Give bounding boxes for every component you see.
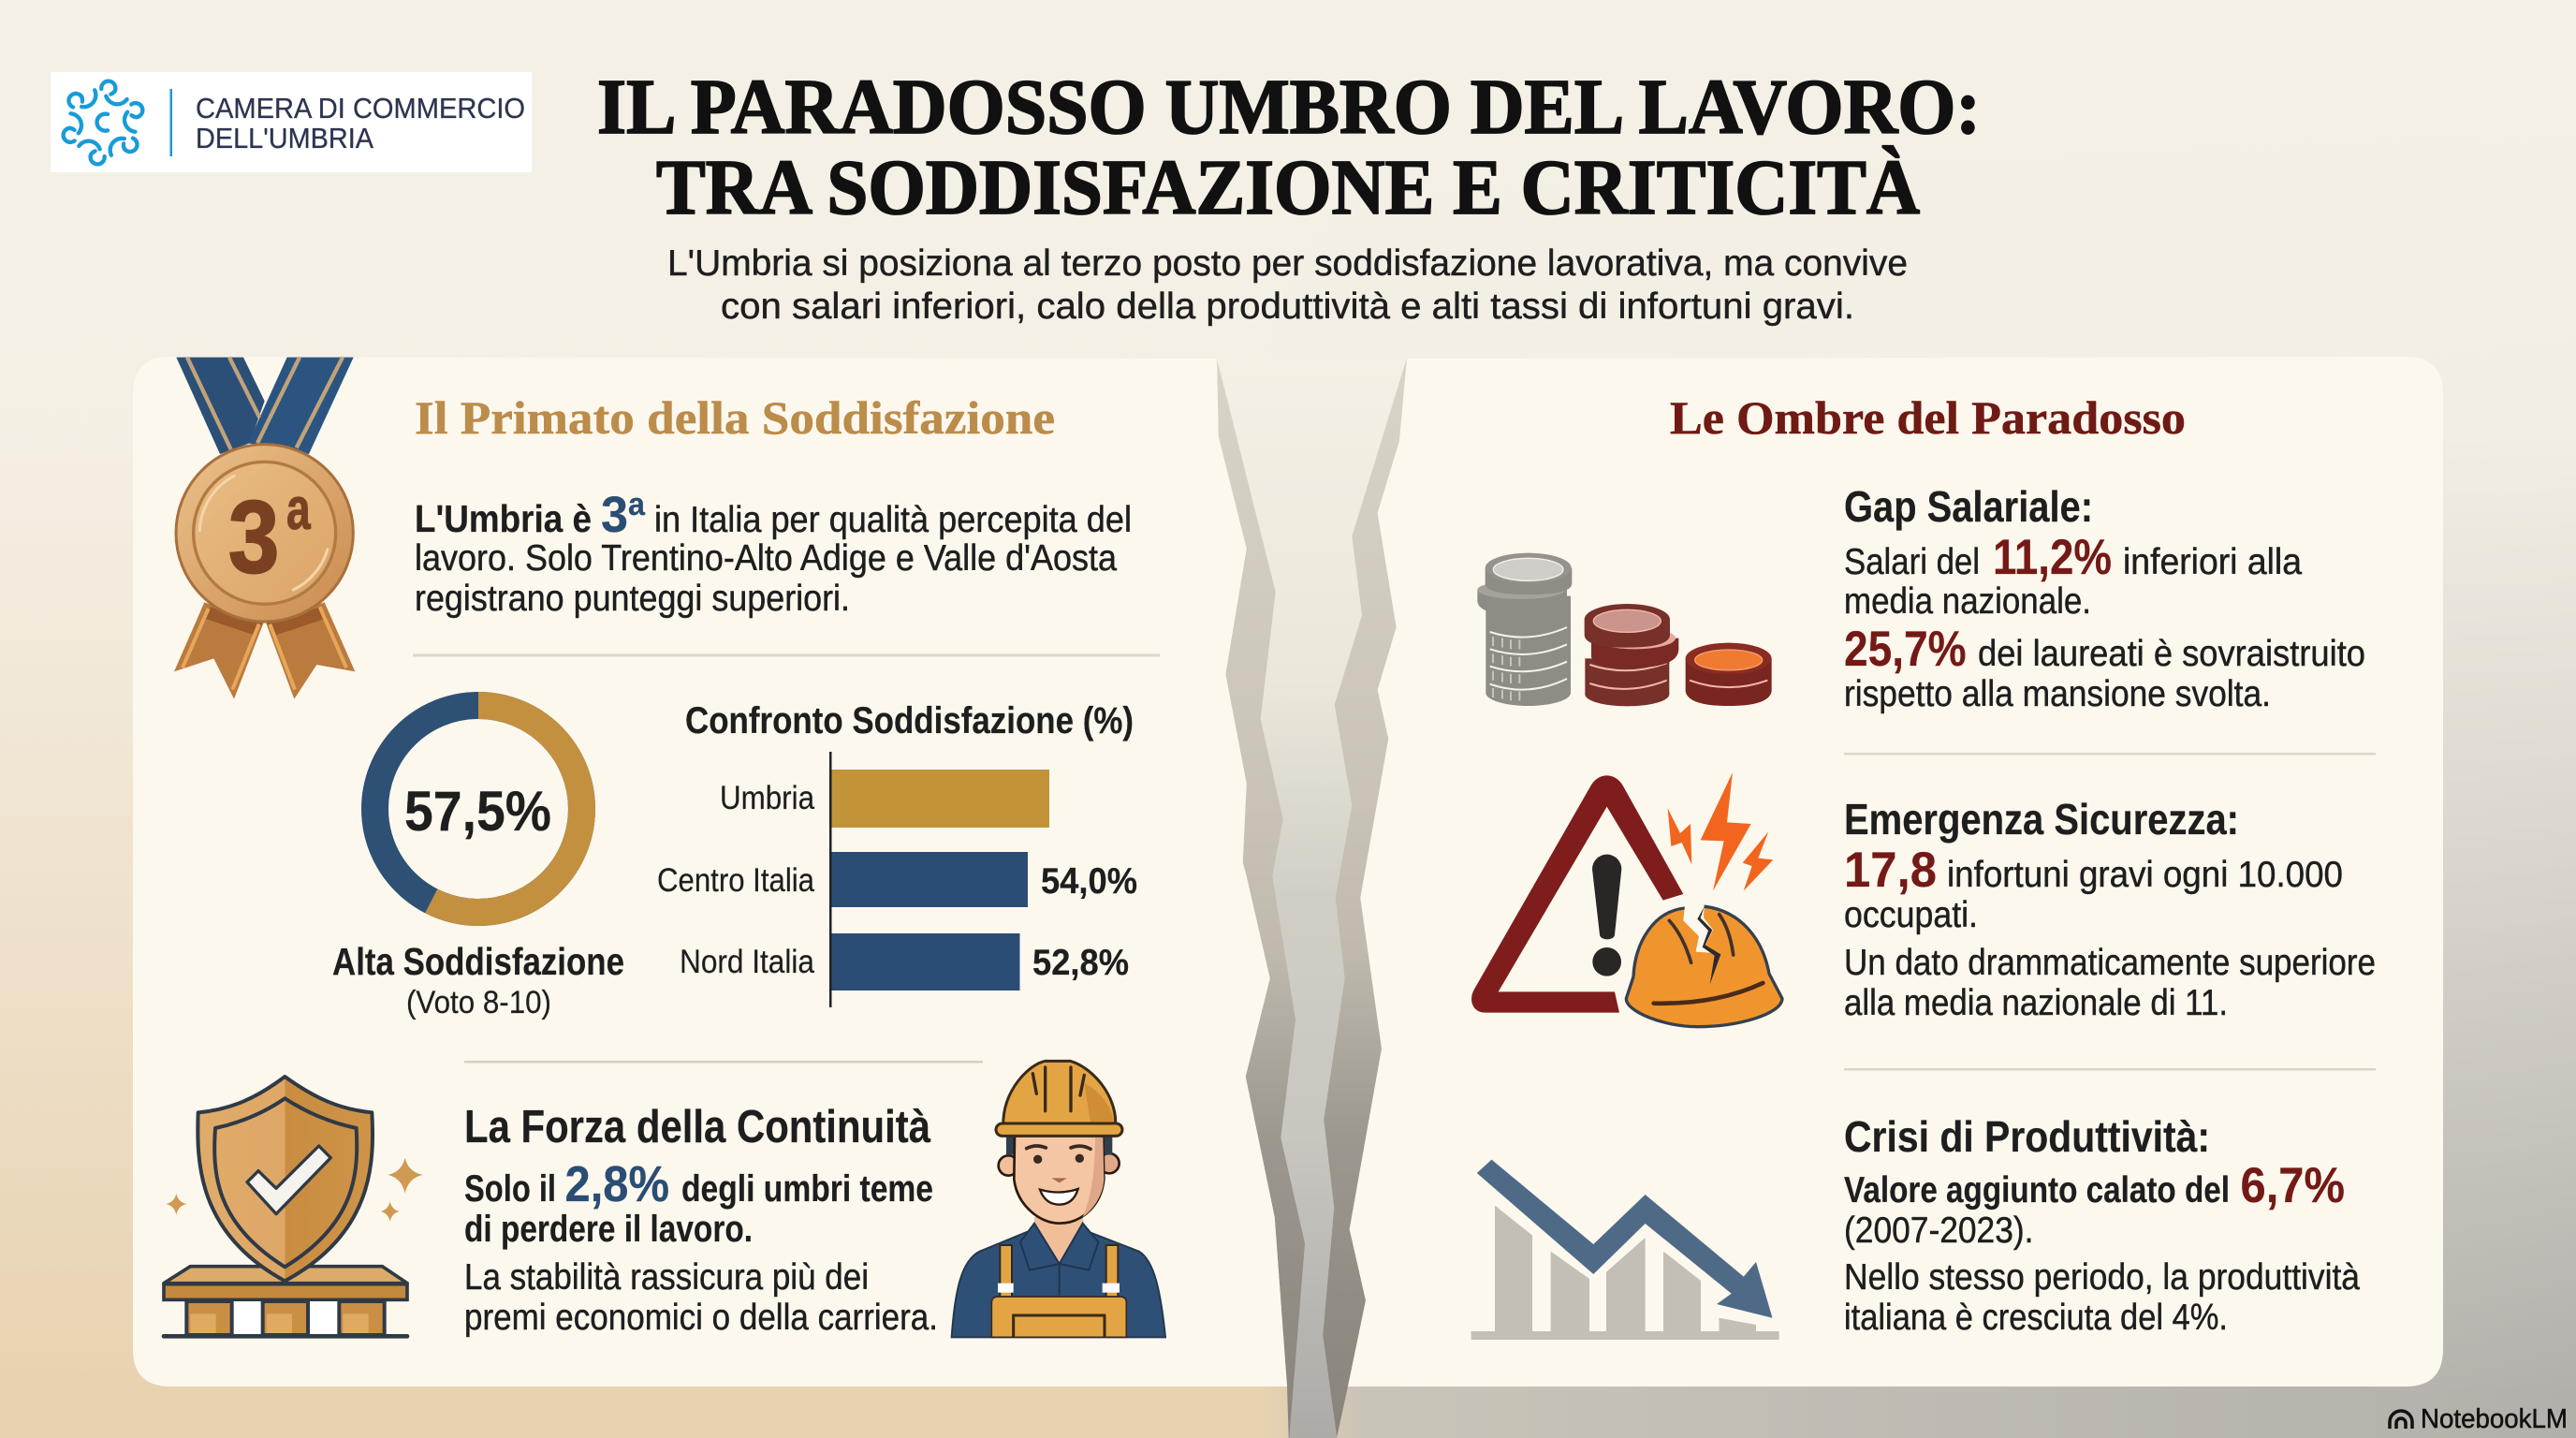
donut chart: 57,5%: 57,5%	[404, 780, 551, 843]
icon: warning triangle and cracked helmet	[1471, 772, 1782, 1027]
title: IL PARADOSSO UMBRO DEL LAVORO:	[597, 64, 1981, 151]
heading: Le Ombre del Paradosso: Le Ombre del Paradosso	[1670, 391, 2186, 444]
text block: La Forza della Continuità: premi economici o della carriera.	[464, 1298, 938, 1338]
crack between the panels	[1217, 359, 1407, 1438]
text block: Gap Salariale: Salari del	[1844, 542, 1980, 582]
bar chart: Confronto Soddisfazione: 54,0%	[1041, 861, 1137, 902]
panel: left, Il Primato della Soddisfazione	[133, 357, 1287, 1387]
logo text	[196, 92, 525, 154]
text block: Gap Salariale	[1844, 482, 2365, 714]
watermark: NotebookLM: NotebookLM	[2421, 1404, 2568, 1434]
text block: terzo posto: in Italia per qualità percepita del	[654, 500, 1132, 540]
subtitle: L'Umbria si posiziona al terzo posto per soddisfazione lavorativa, ma convive	[667, 243, 1908, 284]
panel: right, Le Ombre del Paradosso	[1348, 357, 2443, 1387]
text block: La Forza della Continuità	[464, 1102, 938, 1338]
text block: terzo posto: lavoro. Solo Trentino-Alto Adige e Valle d'Aosta	[415, 538, 1117, 579]
text block: Gap Salariale: rispetto alla mansione svolta.	[1844, 674, 2271, 714]
text block: Crisi di Produttività: italiana è cresciuta del 4%.	[1844, 1298, 2228, 1338]
text block: terzo posto	[415, 487, 1132, 619]
icon: shield on platform	[164, 1077, 423, 1336]
text block: Emergenza Sicurezza	[1844, 795, 2376, 1023]
donut chart: 57,5%	[374, 706, 582, 912]
text block: Gap Salariale: Gap Salariale:	[1844, 482, 2093, 531]
bar chart: Confronto Soddisfazione: Confronto Soddisfazione (%)	[685, 700, 1134, 741]
text block: La Forza della Continuità: di perdere il lavoro.	[464, 1209, 753, 1250]
text block: La Forza della Continuità: Solo il	[464, 1168, 556, 1210]
text block: Crisi di Produttività: Nello stesso periodo, la produttività	[1844, 1257, 2360, 1298]
text block: Gap Salariale: 11,2%	[1993, 530, 2112, 585]
text block: terzo posto: a	[628, 487, 646, 522]
title	[597, 64, 1981, 231]
text block: terzo posto: 3	[601, 487, 628, 543]
text block: La Forza della Continuità: degli umbri teme	[681, 1168, 933, 1210]
bar chart: Confronto Soddisfazione	[657, 700, 1137, 1007]
bar chart: Confronto Soddisfazione: Centro Italia	[657, 862, 814, 899]
text block: Gap Salariale: media nazionale.	[1844, 581, 2091, 622]
icon: bronze medal	[174, 358, 355, 699]
text block: Emergenza Sicurezza: Emergenza Sicurezza:	[1844, 795, 2239, 844]
text block: Emergenza Sicurezza: 17,8	[1844, 843, 1937, 898]
logo: Camera di Commercio dell'Umbria	[51, 72, 532, 172]
text block: terzo posto: L'Umbria è	[415, 497, 592, 540]
text block: Emergenza Sicurezza: Un dato drammaticamente superiore	[1844, 943, 2376, 983]
donut caption: (Voto 8-10)	[406, 985, 551, 1020]
logo text: CAMERA DI COMMERCIO	[196, 92, 525, 125]
icon: declining chart	[1471, 1160, 1779, 1340]
text block: Gap Salariale: inferiori alla	[2123, 542, 2302, 582]
text block: La Forza della Continuità: La stabilità rassicura più dei	[464, 1257, 869, 1298]
text block: Crisi di Produttività: (2007-2023).	[1844, 1211, 2033, 1251]
text block: Gap Salariale: 25,7%	[1844, 622, 1967, 677]
text block: Gap Salariale: dei laureati è sovraistruito	[1978, 634, 2365, 674]
heading: Il Primato della Soddisfazione: Il Primato della Soddisfazione	[415, 391, 1055, 444]
text block: Crisi di Produttività: 6,7%	[2241, 1158, 2345, 1213]
bar chart: Confronto Soddisfazione: Umbria	[720, 780, 814, 816]
text block: La Forza della Continuità: La Forza della Continuità	[464, 1102, 931, 1152]
text block: Crisi di Produttività	[1844, 1112, 2360, 1338]
text block: Emergenza Sicurezza: alla media nazionale di 11.	[1844, 983, 2228, 1023]
subtitle	[667, 243, 1908, 327]
title: TRA SODDISFAZIONE E CRITICITÀ	[656, 144, 1920, 231]
text block: Emergenza Sicurezza: infortuni gravi ogni 10.000	[1947, 855, 2343, 895]
text block: Crisi di Produttività: Valore aggiunto calato del	[1844, 1170, 2230, 1211]
text block: terzo posto: registrano punteggi superiori.	[415, 579, 850, 619]
subtitle: con salari inferiori, calo della produttività e alti tassi di infortuni gravi.	[721, 286, 1854, 327]
text block: Emergenza Sicurezza: occupati.	[1844, 895, 1978, 935]
text block: Crisi di Produttività: Crisi di Produttività:	[1844, 1112, 2210, 1161]
bar chart: Confronto Soddisfazione: 52,8%	[1032, 943, 1129, 983]
icon: bronze medal: a	[286, 477, 311, 542]
icon: bronze medal: 3	[228, 481, 279, 595]
bar chart: Confronto Soddisfazione: Nord Italia	[680, 944, 814, 980]
icon: smiling worker	[952, 1061, 1165, 1337]
icon: logo swirl	[55, 81, 151, 164]
text block: La Forza della Continuità: 2,8%	[565, 1156, 669, 1212]
donut caption: Alta Soddisfazione	[332, 940, 624, 983]
icon: coin stacks	[1477, 553, 1772, 706]
logo text: DELL'UMBRIA	[196, 122, 373, 154]
donut caption	[332, 940, 624, 1020]
